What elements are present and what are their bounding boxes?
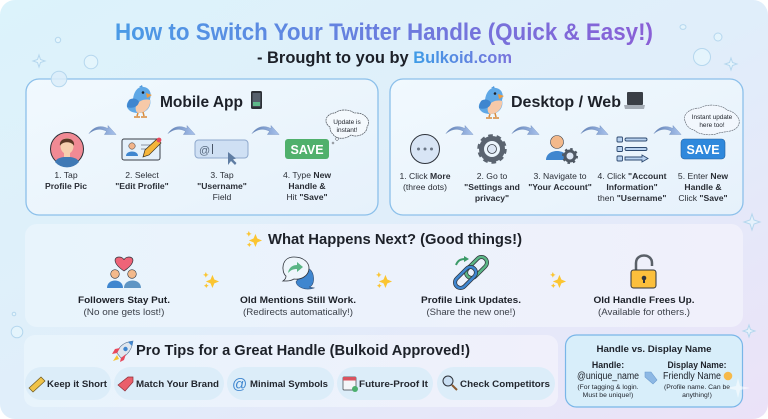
panel: pro tips bbox=[24, 335, 558, 407]
item: old mentions: Old Mentions Still Work. bbox=[240, 295, 356, 306]
step 3 label bbox=[197, 170, 247, 202]
column: display name: Display Name: bbox=[668, 360, 727, 370]
pill: match your brand: Match Your Brand bbox=[136, 379, 219, 390]
icon: list bbox=[617, 137, 648, 162]
heading: what happens next: What Happens Next? (Good things!) bbox=[268, 231, 522, 248]
item: old handle: Old Handle Frees Up. bbox=[594, 295, 694, 306]
icon: username field: @ bbox=[199, 145, 210, 157]
step 2 label: 2. Select bbox=[125, 170, 159, 180]
icon: account with gear bbox=[546, 136, 577, 163]
column: handle bbox=[577, 360, 639, 399]
step 1 label bbox=[45, 170, 87, 191]
step 4 label: Hit "Save" bbox=[286, 192, 328, 202]
pill: future-proof it: Future-Proof It bbox=[359, 379, 429, 390]
item: old mentions bbox=[240, 257, 356, 317]
step 1 label bbox=[399, 171, 451, 192]
step 4 label: then "Username" bbox=[598, 193, 666, 203]
arrow 3 bbox=[581, 125, 608, 135]
button: save bbox=[681, 139, 725, 159]
pill: match your brand bbox=[114, 367, 224, 400]
item: followers: Followers Stay Put. bbox=[78, 295, 170, 306]
icon: two people and heart bbox=[107, 257, 141, 288]
arrow 2 bbox=[168, 125, 195, 135]
step 4 label: Handle & bbox=[288, 181, 326, 191]
step 2 label: "Edit Profile" bbox=[115, 181, 169, 191]
icon: padlock bbox=[631, 256, 656, 288]
white sparkle bbox=[726, 378, 750, 398]
callout: instant update here too: Instant update bbox=[692, 114, 733, 121]
heading: pro tips: Pro Tips for a Great Handle (Bulkoid Approved!) bbox=[136, 342, 470, 359]
pill: check competitors: Check Competitors bbox=[460, 379, 550, 390]
button: save: SAVE bbox=[290, 143, 324, 157]
step 4 label: 4. Type New bbox=[283, 170, 331, 180]
title: How to Switch Your Twitter Handle (Quick & Easy!) bbox=[115, 19, 653, 46]
item: old handle bbox=[594, 256, 694, 317]
item: profile link: Profile Link Updates. bbox=[421, 295, 521, 306]
item: followers: (No one gets lost!) bbox=[84, 306, 164, 317]
arrow 2 bbox=[512, 125, 539, 135]
pill: check competitors bbox=[437, 367, 555, 400]
step 3 label bbox=[528, 171, 592, 192]
icon: tag bbox=[645, 372, 657, 384]
heading: handle vs display name: Handle vs. Display Name bbox=[596, 344, 712, 355]
icon: rocket bbox=[112, 341, 133, 362]
step 3 label: 3. Navigate to bbox=[533, 171, 587, 181]
step 3 label: 3. Tap bbox=[210, 170, 234, 180]
step 4 label bbox=[597, 171, 667, 203]
column: handle: @unique_name bbox=[577, 371, 639, 382]
panel: what happens next bbox=[25, 224, 743, 327]
step 4 label: Information" bbox=[606, 182, 658, 192]
panel: desktop / web bbox=[390, 79, 743, 215]
icon: speech bubbles bbox=[283, 257, 314, 289]
pill: keep it short: Keep it Short bbox=[47, 379, 108, 390]
step 3 label: Field bbox=[213, 192, 232, 202]
step 5 label: 5. Enter New bbox=[678, 171, 728, 181]
arrow 1 bbox=[89, 125, 116, 135]
column: display name: Friendly Name bbox=[663, 371, 721, 382]
step 2 label: "Settings and bbox=[464, 182, 520, 192]
pill: keep it short bbox=[25, 367, 111, 400]
panel: mobile app bbox=[26, 71, 378, 215]
pill: future-proof it bbox=[337, 367, 433, 400]
icon: profile picture bbox=[50, 132, 84, 167]
step 5 label: Handle & bbox=[684, 182, 722, 192]
step 1 label: (three dots) bbox=[403, 182, 447, 192]
pill: minimal symbols bbox=[227, 367, 334, 400]
column: handle: Must be unique!) bbox=[583, 392, 633, 399]
icon: chain link bbox=[453, 255, 489, 290]
button: save: SAVE bbox=[686, 143, 720, 157]
step 1 label: Profile Pic bbox=[45, 181, 87, 191]
callout: update is instant: Update is bbox=[333, 119, 361, 126]
heading: desktop / web: Desktop / Web bbox=[511, 94, 621, 111]
arrow 1 bbox=[446, 125, 473, 135]
callout: instant update here too bbox=[684, 105, 739, 135]
heading: mobile app: Mobile App bbox=[160, 94, 243, 111]
step 2 label bbox=[115, 170, 169, 191]
panel: handle vs display name bbox=[566, 335, 750, 407]
subtitle: - Brought to you by Bulkoid.com bbox=[257, 49, 512, 67]
step 2 label bbox=[464, 171, 520, 203]
step 1 label: 1. Click More bbox=[399, 171, 451, 181]
arrow 3 bbox=[252, 125, 279, 135]
column: handle: Handle: bbox=[592, 360, 624, 370]
arrow 4 bbox=[654, 125, 681, 135]
step 4 label bbox=[283, 170, 331, 202]
column: handle: (For tagging & login. bbox=[577, 384, 639, 391]
icon: bird bbox=[127, 85, 152, 117]
icon: edit profile card bbox=[122, 138, 161, 160]
step 5 label: Click "Save" bbox=[678, 193, 728, 203]
callout: update is instant: instant! bbox=[337, 127, 358, 134]
icon: sparkles bbox=[246, 231, 262, 247]
step 1 label: 1. Tap bbox=[54, 170, 78, 180]
icon: sparkles bbox=[550, 272, 566, 288]
item: followers bbox=[78, 257, 170, 317]
callout: update is instant bbox=[326, 110, 369, 144]
step 2 label: privacy" bbox=[475, 193, 509, 203]
icon: gear bbox=[479, 136, 505, 162]
item: profile link: (Share the new one!) bbox=[426, 306, 516, 317]
button: save bbox=[285, 139, 329, 159]
decorative bubbles and sparkles bbox=[11, 25, 760, 338]
icon: username field bbox=[195, 140, 248, 165]
item: profile link bbox=[421, 255, 521, 317]
step 4 label: 4. Click "Account bbox=[597, 171, 667, 181]
step 2 label: 2. Go to bbox=[477, 171, 508, 181]
step 5 label bbox=[678, 171, 728, 203]
step 3 label: "Username" bbox=[197, 181, 247, 191]
callout: instant update here too: here too! bbox=[699, 122, 725, 129]
icon: bird bbox=[479, 86, 504, 118]
step 3 label: "Your Account" bbox=[528, 182, 592, 192]
column: display name: anything!) bbox=[682, 392, 712, 399]
pill: minimal symbols: @ bbox=[232, 376, 247, 393]
icon: sparkles bbox=[376, 272, 392, 288]
item: old mentions: (Redirects automatically!) bbox=[243, 306, 353, 317]
icon: sparkles bbox=[203, 272, 219, 288]
pill: minimal symbols: Minimal Symbols bbox=[250, 379, 328, 390]
column: display name: (Profile name. Can be bbox=[664, 384, 730, 391]
icon: phone bbox=[251, 91, 262, 109]
icon: laptop bbox=[624, 92, 645, 109]
icon: three dots bbox=[410, 134, 440, 164]
column: display name bbox=[663, 360, 732, 399]
item: old handle: (Available for others.) bbox=[598, 306, 690, 317]
